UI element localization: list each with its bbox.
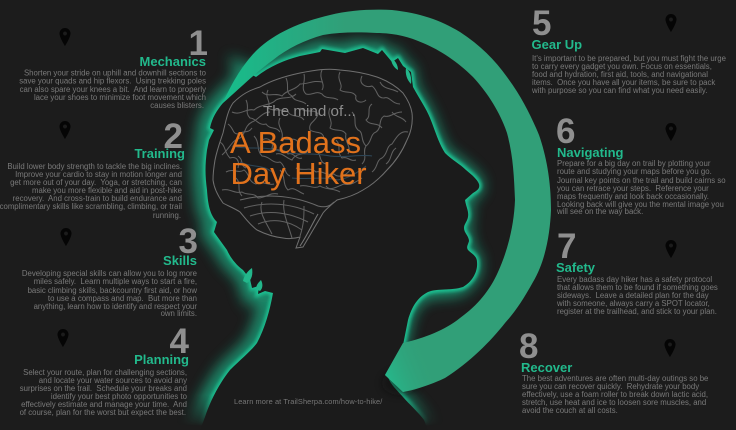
body text: training: make you more flexible and aid in post-hike bbox=[32, 186, 182, 195]
panel: 1 mechanics bbox=[19, 24, 208, 110]
body text: navigating: you can retrace your steps. Reference your bbox=[557, 184, 709, 193]
body text: mechanics: causes blisters. bbox=[150, 101, 204, 110]
brain illustration bbox=[213, 69, 412, 248]
body text: safety: register at the trailhead, and stick to your plan. bbox=[557, 307, 717, 316]
icon: map pin 7 bbox=[666, 240, 676, 258]
panel: 6 navigating bbox=[556, 112, 726, 216]
panel: 7 safety bbox=[556, 227, 718, 316]
icon: map pin 4 bbox=[58, 329, 68, 347]
body text: training bbox=[0, 162, 182, 220]
body text: planning: identify your best photo opportunities to bbox=[51, 392, 188, 401]
body text: planning: and locate your water sources to avoid any bbox=[39, 376, 187, 385]
body text: planning: effectively estimate and manage your time. And bbox=[21, 400, 187, 409]
title: the mind of: The mind of... bbox=[263, 103, 356, 120]
body text: training: Build lower body strength to tackle the big inclines. bbox=[7, 162, 182, 171]
body text: skills: to use a compass and map. But more than bbox=[48, 294, 197, 303]
panel: 2 training: Training bbox=[134, 146, 185, 161]
body text: mechanics: lace your shoes to minimize foot movement which bbox=[34, 93, 206, 102]
green circular arc around head bbox=[223, 10, 551, 392]
icon: map pin 3 bbox=[60, 228, 72, 246]
source link: Learn more at TrailSherpa.com/how-to-hike/ bbox=[234, 397, 383, 406]
body text: safety: with someone, always carry a SPOT locator, bbox=[556, 299, 710, 308]
body text: recover: effectively, use a foam roller to break down lactic acid, bbox=[522, 390, 708, 399]
body text: training: get more out of your day. Yoga, or stretching, can bbox=[10, 178, 182, 187]
body text: training: complimentary skills like scrambling, climbing, or trail bbox=[0, 202, 182, 211]
body text: training: Improve your cardio to stay in motion longer and bbox=[15, 170, 182, 179]
panel: 2 training bbox=[0, 117, 185, 220]
panel: 6 navigating: Navigating bbox=[557, 145, 624, 160]
body text: mechanics: can also spare your knees a bit. And learn to properly bbox=[20, 85, 206, 94]
body text: navigating: will see on the way back. bbox=[556, 207, 643, 216]
title: a badass day hiker: Day Hiker bbox=[230, 156, 367, 191]
panel: 5 gear up: 5 bbox=[532, 4, 551, 43]
body text: planning bbox=[20, 368, 188, 417]
panel: 4 planning bbox=[20, 322, 190, 417]
body text: gear up bbox=[531, 54, 726, 95]
body text: navigating: maps frequently and look back occasionally. bbox=[557, 192, 709, 201]
panel: 7 safety: 7 bbox=[557, 227, 576, 266]
panel: 5 gear up bbox=[531, 4, 726, 95]
title: a badass day hiker bbox=[230, 125, 367, 191]
title block bbox=[230, 103, 367, 191]
body text: gear up: items. Once you have all your items, be sure to pack bbox=[532, 78, 715, 87]
body text: gear up: It's important to be prepared, but you must fight the urge bbox=[532, 54, 726, 63]
panel: 5 gear up: Gear Up bbox=[532, 37, 582, 52]
body text: skills bbox=[22, 269, 197, 318]
body text: planning: of course, plan for the worst but expect the best. bbox=[20, 408, 186, 417]
body text: navigating: Looking back will give you the mental image you bbox=[557, 200, 724, 209]
body text: skills: miles safely. Learn multiple ways to start a fire, bbox=[34, 277, 197, 286]
body text: safety: Every badass day hiker has a safety protocol bbox=[557, 275, 712, 284]
body text: gear up: food and hydration, first aid, tools, and navigational bbox=[532, 70, 708, 79]
panel: 4 planning: 4 bbox=[170, 322, 190, 361]
body text: recover: stretch, use heat and ice to loosen sore muscles, and bbox=[522, 398, 706, 407]
panel: 8 recover: 8 bbox=[519, 327, 538, 366]
body text: skills: Developing special skills can allow you to log more bbox=[22, 269, 197, 278]
icon: map pin 2 bbox=[60, 121, 70, 139]
panel: 6 navigating: 6 bbox=[556, 112, 575, 151]
panel: 8 recover bbox=[519, 327, 708, 415]
body text: gear up: with purpose so you can find what you need easily. bbox=[531, 86, 707, 95]
body text: safety: sideways. Leave a detailed plan for the day bbox=[557, 291, 709, 300]
body text: navigating bbox=[556, 159, 726, 216]
icon: map pin 1 bbox=[60, 28, 70, 46]
body text: planning: surprises on the trail. Schedule your breaks and bbox=[20, 384, 187, 393]
body text: mechanics: Shorten your stride on uphill and downhill sections to bbox=[24, 68, 207, 78]
panel: 8 recover: Recover bbox=[521, 360, 572, 375]
panel: 4 planning: Planning bbox=[134, 352, 189, 367]
title: a badass day hiker: A Badass bbox=[230, 125, 361, 160]
ring shadow on neck bbox=[382, 371, 418, 395]
body text: recover: The best adventures are often multi-day outings so be bbox=[522, 374, 708, 383]
panel: 3 skills bbox=[22, 222, 198, 318]
icon: map pin 5 bbox=[666, 14, 676, 32]
body text: safety: that allows them to be found if something goes bbox=[557, 283, 718, 292]
body text: recover: sure you can recover quickly. Rehydrate your body bbox=[522, 382, 699, 391]
icon: map pin 6 bbox=[666, 123, 676, 141]
body text: training: running. bbox=[153, 211, 181, 220]
panel: 3 skills: 3 bbox=[179, 222, 198, 261]
panel: 3 skills: Skills bbox=[163, 253, 197, 268]
hair wisps bbox=[243, 58, 411, 291]
panel: 1 mechanics: 1 bbox=[189, 24, 208, 63]
body text: navigating: route and studying your maps before you go. bbox=[557, 167, 712, 176]
icon: map pin 8 bbox=[664, 339, 676, 357]
body text: recover: avoid the couch at all costs. bbox=[522, 406, 618, 415]
body text: skills: own limits. bbox=[161, 309, 197, 318]
body text: recover bbox=[522, 374, 708, 415]
panel: 1 mechanics: Mechanics bbox=[140, 54, 206, 69]
panel: 2 training: 2 bbox=[164, 117, 183, 156]
panel: 7 safety: Safety bbox=[556, 260, 596, 275]
body text: mechanics: save your quads and hip flexors. Using trekking poles bbox=[19, 76, 206, 86]
body text: training: recovery. And cross-train to build endurance and bbox=[13, 194, 182, 203]
body text: skills: anything, learn how to identify and respect your bbox=[34, 302, 197, 311]
head silhouette with green glow bbox=[194, 48, 479, 430]
body text: mechanics bbox=[19, 68, 207, 110]
body text: safety bbox=[556, 275, 718, 316]
body text: planning: Select your route, plan for challenging sections, bbox=[23, 368, 187, 377]
body text: navigating: Prepare for a big day on trail by plotting your bbox=[557, 159, 711, 168]
body text: skills: basic climbing skills, backcountry first aid, or how bbox=[28, 286, 197, 295]
body text: navigating: Journal key points on the trail and build cairns so bbox=[557, 176, 726, 185]
body text: gear up: to carry every gadget you own. Focus on essentials, bbox=[532, 62, 712, 71]
